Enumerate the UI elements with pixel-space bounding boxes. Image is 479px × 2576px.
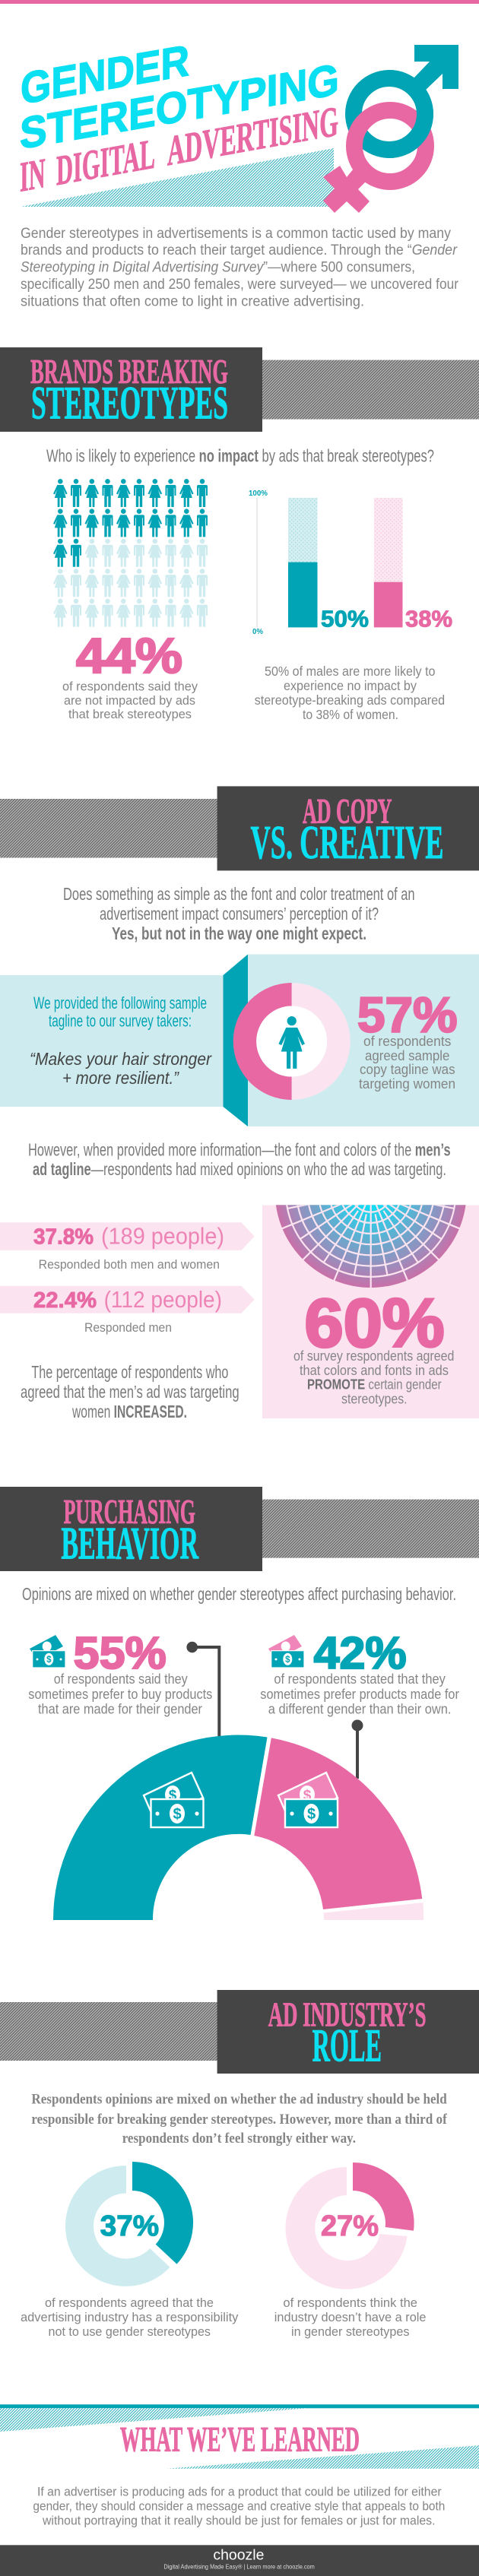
bar chart caption: stereotype-breaking ads compared <box>255 692 445 708</box>
icon: cash on teal segment: $ <box>169 1788 177 1804</box>
donut chart: 37 percent: 37% <box>100 2210 159 2242</box>
intro paragraph: brands and products to reach their target audience. Through the “Gender <box>21 242 458 258</box>
stat: 57 percent <box>357 987 458 1092</box>
60 percent caption: that colors and fonts in ads <box>300 1363 449 1378</box>
stat ribbon: 37.8 percent <box>0 1222 255 1250</box>
section header: Purchasing Behavior: BEHAVIOR <box>61 1519 198 1569</box>
top pink bar <box>0 0 479 4</box>
footer tagline: Digital Advertising Made Easy® | Learn more at choozle.com <box>163 2563 315 2570</box>
donut chart: 27 percent: 27% <box>321 2210 379 2242</box>
section header: Purchasing Behavior <box>0 1487 479 1571</box>
callout: 55 percent: that are made for their gender <box>38 1701 202 1716</box>
title line: Stereotyping: STEREOTYPING <box>20 55 339 159</box>
bar chart caption: experience no impact by <box>284 678 417 693</box>
section header: Brands Breaking Stereotypes: BRANDS BREAKING <box>30 353 228 391</box>
icon: cash on teal segment <box>144 1773 204 1827</box>
icon: cash pink and teal: $ <box>285 1656 290 1665</box>
section header: Ad Industry's Role: ROLE <box>312 2021 382 2072</box>
stat: 44 percent <box>62 628 198 721</box>
callout: 42 percent <box>260 1628 459 1779</box>
bar chart caption: 50% of males are more likely to <box>265 664 435 679</box>
section header: Ad Copy vs. Creative: AD COPY <box>303 792 392 832</box>
stat ribbon: 22.4 percent: (112 people) <box>104 1286 222 1313</box>
icon: interlocked male and female symbols <box>323 45 458 213</box>
connector line 42 percent <box>351 1719 363 1779</box>
section header: Brands Breaking Stereotypes: STEREOTYPES <box>31 379 228 429</box>
stat: 44 percent: are not impacted by ads <box>64 693 195 708</box>
caption: 37 percent: of respondents agreed that the <box>45 2296 214 2310</box>
title line: Gender: GENDER <box>21 36 189 114</box>
donut chart: 37 percent <box>65 2162 193 2286</box>
60 percent caption: of survey respondents agreed <box>293 1348 454 1364</box>
bar chart: no impact by gender: 100% <box>249 490 268 498</box>
quote tagline: + more resilient.” <box>62 1068 179 1088</box>
section header: Ad Copy vs. Creative <box>0 786 479 870</box>
donut: 57 percent women <box>233 983 351 1100</box>
stat ribbon: 37.8 percent: (189 people) <box>101 1223 224 1250</box>
stat: 60 percent: 60% <box>304 1286 444 1362</box>
icon: cash teal: $ <box>46 1656 52 1665</box>
stat: 57 percent: agreed sample <box>365 1048 449 1063</box>
callout: 42 percent: 42% <box>314 1628 407 1678</box>
bar: women 38 percent <box>374 498 452 632</box>
bar: men 50 percent: 50% <box>321 606 369 632</box>
callout: 42 percent: a different gender than their own. <box>268 1701 451 1716</box>
conclusion paragraph: gender, they should consider a message and creative style that appeals to both <box>33 2499 445 2514</box>
bar: men 50 percent <box>288 498 369 632</box>
paragraph: ad industry responsibility <box>31 2092 447 2147</box>
chart: purchasing semi-donut <box>53 1735 423 1920</box>
hatched wedge behind title <box>21 148 334 207</box>
icon: cash on pink segment: $ <box>303 1788 312 1804</box>
label: responded both: Responded both men and women <box>39 1258 220 1272</box>
chart: radial colour fan <box>275 1205 465 1288</box>
question heading: ad copy: advertisement impact consumers’ perception of it? <box>100 904 379 924</box>
callout: 42 percent: sometimes prefer products made for <box>260 1687 459 1702</box>
conclusion paragraph: without portraying that it really should be just for females or just for males. <box>42 2514 436 2528</box>
title line: In Digital Advertising <box>20 98 338 201</box>
callout: 55 percent <box>28 1628 219 1737</box>
stat ribbon: 37.8 percent: 37.8% <box>33 1225 94 1250</box>
caption: 37 percent <box>21 2296 239 2339</box>
heading: percentage increased: women INCREASED. <box>71 1402 187 1421</box>
stat ribbon: 22.4 percent <box>0 1286 255 1313</box>
donut chart: 27 percent <box>286 2163 414 2289</box>
stat: 57 percent: of respondents <box>363 1034 451 1049</box>
stat: 57 percent: targeting women <box>359 1076 455 1092</box>
hero title block <box>20 36 458 213</box>
quote tagline <box>30 1049 212 1088</box>
segment: 42 percent pink <box>254 1738 422 1909</box>
segment: 55 percent teal <box>53 1735 268 1920</box>
stat: 57 percent: copy tagline was <box>360 1062 455 1077</box>
footer <box>0 2545 479 2576</box>
connector line 55 percent <box>186 1642 219 1737</box>
title line: In Digital Advertising: IN <box>20 150 46 201</box>
icon: cash on pink segment: $ <box>307 1806 316 1823</box>
caption: 27 percent <box>274 2296 426 2339</box>
intro paragraph <box>21 226 459 310</box>
caption: 37 percent: not to use gender stereotypes <box>49 2325 211 2339</box>
section header: Purchasing Behavior: PURCHASING <box>64 1493 195 1531</box>
sample tagline intro: tagline to our survey takers: <box>49 1011 192 1031</box>
bar: women 38 percent: 38% <box>405 606 452 632</box>
bar chart caption: to 38% of women. <box>303 707 398 722</box>
intro paragraph: Gender stereotypes in advertisements is a common tactic used by many <box>21 226 451 242</box>
heading: mixed opinions <box>28 1140 451 1179</box>
callout: 55 percent: sometimes prefer to buy products <box>28 1687 212 1702</box>
quote tagline: “Makes your hair stronger <box>30 1049 212 1069</box>
section: what we've learned <box>0 2404 479 2528</box>
title line: In Digital Advertising: ADVERTISING <box>167 98 338 175</box>
section header: Ad Industry's Role <box>0 1990 479 2074</box>
60 percent caption: PROMOTE certain gender <box>307 1377 442 1393</box>
caption: 27 percent: industry doesn’t have a role <box>274 2311 426 2324</box>
icon: cash teal <box>30 1635 65 1668</box>
60 percent caption: stereotypes. <box>341 1392 408 1407</box>
icon: cash pink and teal <box>268 1635 304 1668</box>
intro paragraph: Stereotyping in Digital Advertising Survey”—where 500 consumers, <box>21 260 415 275</box>
label: responded men: Responded men <box>84 1321 172 1335</box>
heading: percentage increased: The percentage of respondents who <box>31 1362 228 1382</box>
icon: cash on teal segment: $ <box>173 1806 182 1823</box>
conclusion paragraph <box>33 2484 445 2528</box>
stat: 44 percent: that break stereotypes <box>68 707 192 721</box>
logo: choozle: choozle <box>213 2548 264 2564</box>
pictogram grid: 44 percent of people <box>53 479 208 627</box>
icon: cash on pink segment <box>278 1773 338 1827</box>
panel: sample tagline <box>0 955 479 1126</box>
heading: percentage increased <box>21 1362 240 1421</box>
segment: remainder <box>324 1903 423 1920</box>
question heading: ad copy: Yes, but not in the way one might expect. <box>112 924 366 943</box>
question heading: ad copy <box>63 884 415 943</box>
stat ribbon: 22.4 percent: 22.4% <box>33 1288 97 1313</box>
conclusion paragraph: If an advertiser is producing ads for a product that could be utilized for either <box>37 2484 442 2498</box>
heading: percentage increased: agreed that the men’s ad was targeting <box>21 1382 240 1402</box>
panel: 60 percent <box>262 1205 479 1418</box>
caption: 27 percent: in gender stereotypes <box>291 2325 409 2339</box>
section header: Brands Breaking Stereotypes <box>0 347 479 432</box>
paragraph: ad industry responsibility: respondents don’t feel strongly either way. <box>122 2131 356 2147</box>
callout: 42 percent: of respondents stated that they <box>274 1671 446 1687</box>
intro paragraph: situations that often come to light in creative advertising. <box>21 293 364 310</box>
sample tagline intro <box>33 993 207 1031</box>
60 percent caption <box>293 1348 454 1407</box>
stat: 44 percent: of respondents said they <box>62 680 198 693</box>
bar chart caption <box>255 664 445 722</box>
bar chart: no impact by gender <box>249 490 452 636</box>
caption: 27 percent: of respondents think the <box>283 2296 417 2310</box>
title line: In Digital Advertising: DIGITAL <box>56 131 155 195</box>
bar chart: no impact by gender: 0% <box>252 628 263 636</box>
stat: 57 percent: 57% <box>357 987 458 1042</box>
callout: 55 percent: 55% <box>74 1628 167 1678</box>
callout: 55 percent: of respondents said they <box>54 1671 188 1687</box>
caption: 37 percent: advertising industry has a responsibility <box>21 2311 239 2324</box>
sample tagline intro: We provided the following sample <box>33 993 207 1012</box>
stat: 44 percent: 44% <box>76 628 182 683</box>
